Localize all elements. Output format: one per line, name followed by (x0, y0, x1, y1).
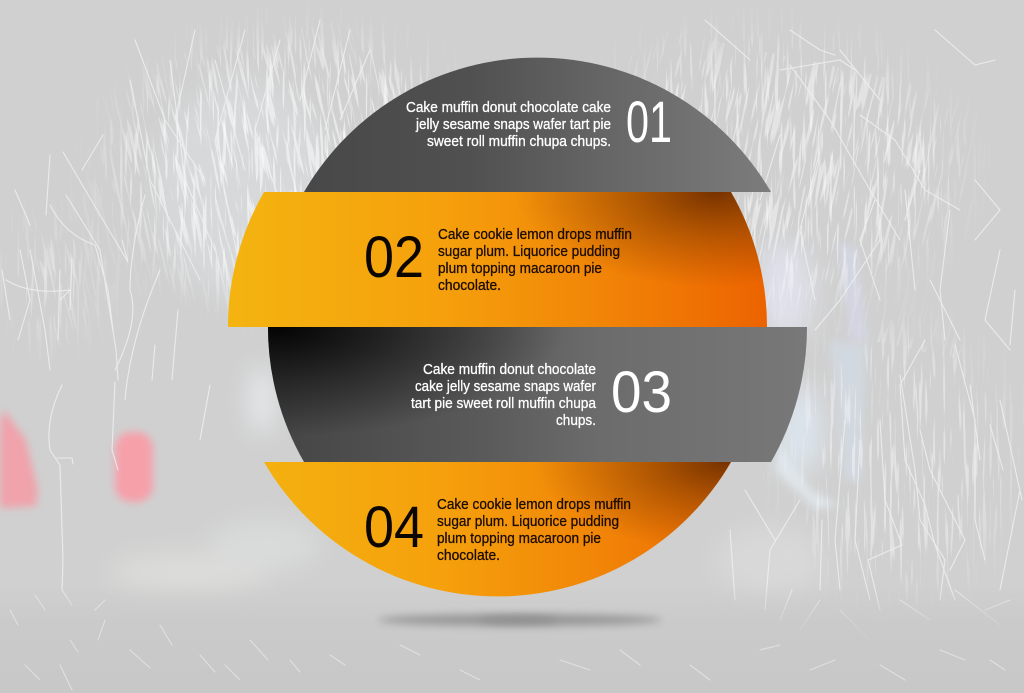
panel 01 description: Cake muffin donut chocolate cake (406, 99, 611, 116)
panel 04 description: sugar plum. Liquorice pudding (437, 513, 619, 530)
panel 03: grey band (268, 327, 807, 462)
panel 02 description (438, 226, 632, 294)
panel 01 description: sweet roll muffin chupa chups. (427, 133, 611, 150)
panel 03 number: 03 (611, 360, 672, 425)
panel 01: grey top cap (304, 58, 771, 192)
red stage lights (0, 410, 153, 508)
panel 02 description: sugar plum. Liquorice pudding (438, 243, 620, 260)
panel 01 description (406, 99, 611, 150)
panel 04: orange bottom cap (264, 462, 731, 596)
panel 03 description (411, 361, 597, 429)
panel 01 number: 01 (626, 90, 672, 155)
soft light patches (110, 80, 825, 595)
crowd at the bottom (0, 585, 1024, 693)
panel 01 description: jelly sesame snaps wafer tart pie (415, 116, 611, 133)
panel 03 description: tart pie sweet roll muffin chupa (411, 395, 597, 412)
blue stage highlights (775, 240, 868, 510)
panel 03 description: cake jelly sesame snaps wafer (415, 378, 596, 395)
panel 04 description (437, 496, 631, 564)
noise streaks (18, 24, 1010, 589)
panel 04 description: plum topping macaroon pie (437, 530, 601, 547)
panel 02 description: plum topping macaroon pie (438, 260, 602, 277)
panel 03 description: chups. (556, 412, 596, 429)
panel 02 description: Cake cookie lemon drops muffin (438, 226, 632, 243)
panel 02: orange band (228, 192, 767, 327)
panel 04 description: Cake cookie lemon drops muffin (437, 496, 631, 513)
panel 02 description: chocolate. (438, 277, 501, 294)
panel 04 number: 04 (364, 495, 424, 560)
panel 03 description: Cake muffin donut chocolate (423, 361, 596, 378)
floating shadow below circle (378, 614, 662, 626)
panel 04 description: chocolate. (437, 547, 500, 564)
panel 02 number: 02 (364, 225, 424, 290)
